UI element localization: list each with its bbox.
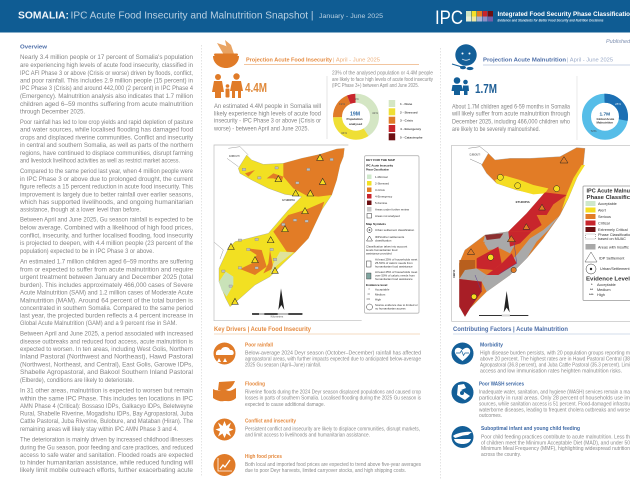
map key: High [597, 293, 605, 297]
map key: High [375, 298, 381, 302]
driver: high food prices: Both local and imported food prices are expected to trend above five-year averages [245, 462, 421, 468]
donut chart: acute malnutrition [586, 98, 624, 135]
text block: paragraph 7: within the same IPC Phase. This includes ten locations in IPC [19, 395, 194, 402]
text block: paragraph 6 [20, 331, 194, 384]
heading: | April - June 2025 [333, 58, 380, 64]
icon: rain cloud [214, 342, 236, 364]
map key: levels humanitarian food [366, 248, 398, 252]
map: acute food insecurity: ETHIOPIA [282, 198, 295, 202]
icon: children [452, 77, 469, 95]
map key: ** [590, 288, 593, 292]
text block: paragraph 4: Between April and June 2025, Gu season rainfall is expected to be [20, 217, 194, 224]
donut chart: acute malnutrition: Malnutrition [596, 120, 613, 124]
factor: infant and young child feeding: across the country. [481, 452, 521, 458]
map key: Evidence level [366, 283, 387, 287]
driver: poor rainfall: 2025 Gu season (April–June) rainfall. [245, 363, 321, 369]
text block: paragraph 3 [19, 168, 194, 214]
text block: paragraph 6: Between April and June 2025, a period associated with increased [20, 331, 194, 338]
map key: Phase Classification [366, 168, 389, 172]
map key: 4-Emergency [375, 194, 393, 198]
factor: poor WASH services: Poor WASH services [479, 382, 524, 388]
text block: paragraph 1: Nearly 3.4 million people or 17 percent of Somalia's population [20, 54, 194, 61]
map key: Map Symbols [366, 222, 386, 226]
text block: paragraph 1: children aged 6–59 months suffering from acute malnutrition [20, 101, 194, 108]
map key: Medium [375, 292, 386, 296]
text block: paragraph 4: below average. Combined with a likelihood of high food prices, [20, 224, 193, 232]
title: January - June 2025 [319, 13, 383, 20]
map key: over 50% of caloric needs from [375, 274, 415, 278]
IPC logo: IPC [435, 8, 463, 29]
map key: *** [366, 298, 371, 302]
map key: * [368, 288, 370, 292]
driver: conflict and insecurity: Conflict and insecurity [245, 419, 297, 425]
icon: child face with spoon [452, 44, 477, 70]
text block: paragraph 5: Acute Malnutrition (SAM) and 1.2 million cases of Moderate Acute [20, 290, 194, 297]
donut chart: acute malnutrition: 28% [615, 102, 621, 106]
driver: poor rainfall: agropastoral areas, with further impacts expected due to anticipated below-average [245, 357, 421, 363]
chart legend: 2 - Stressed [400, 110, 418, 114]
map: acute food insecurity [214, 145, 362, 321]
text block: paragraph 7: Cattle Pastoral, Juba Riverine, Bulobure, and Mataban (Hiran). The [20, 418, 194, 425]
factor: morbidity [452, 342, 630, 374]
donut chart: population by phase: 34% [341, 131, 347, 135]
text block: paragraph 1: and poor rainfall. This includes 2.9 million people (15 percent) in [20, 78, 194, 85]
text block: paragraph 3: assistance, though at a lower level than before. [20, 207, 141, 214]
map key: Areas with Insuffic [598, 246, 629, 250]
north arrow [278, 288, 284, 310]
icon: explosion [214, 418, 236, 440]
driver: poor rainfall: Poor rainfall [245, 343, 273, 349]
donut chart: population by phase: 41% [372, 111, 378, 115]
text block: paragraph 3: improvement is largely due to better rainfall over earlier seasons, [20, 191, 193, 198]
text block: paragraph 8: likely limit mobile outreach efforts, further exacerbating acute [20, 467, 194, 474]
map key: Extremely Critical [598, 228, 628, 232]
text block: paragraph 5: urgent treatment between January and December 2025 (total [20, 274, 193, 281]
driver: flooding [213, 381, 421, 408]
icon: family [212, 73, 243, 98]
driver: conflict and insecurity: and limit access to livelihoods and humanitarian assistance. [245, 432, 370, 438]
driver: conflict and insecurity: Persistent conflict and insecurity are likely to displace communities, disrupt markets, [245, 427, 420, 433]
factor: infant and young child feeding [452, 426, 630, 458]
text block: paragraph 7: AMN Phase 4 (Critical): Bossaso IDPs, Galkacyo IDPs, Beletweyne [20, 403, 194, 410]
chart legend: 5 - Catastrophe [400, 135, 423, 139]
heading: | April - June 2025 [567, 58, 613, 64]
map key: Acceptable [597, 283, 616, 287]
donut chart: population by phase: 6% [354, 97, 359, 101]
map key: Areas under further review [375, 208, 410, 212]
map key: Critical [598, 222, 610, 226]
chart legend: 1 - None [400, 102, 412, 106]
text block: paragraph 2: crops and displaced riverine communities. Conflict and insecurity [20, 134, 194, 142]
heading: Projection Acute Food Insecurity [246, 58, 333, 64]
text block: 1.7M description: will likely suffer from acute malnutrition through [451, 111, 571, 118]
map key: humanitarian food assistance [375, 264, 413, 268]
icon: hand washing [452, 382, 474, 404]
map key: *** [589, 293, 594, 297]
icon: feeding bowl [452, 426, 474, 448]
text block: analysed population: (IPC Phase 3+) between April and June 2025. [332, 83, 419, 89]
text block: paragraph 2 [20, 119, 194, 165]
map key [364, 156, 419, 313]
driver: conflict and insecurity [214, 418, 420, 440]
panel: projection acute malnutrition [451, 44, 630, 321]
driver: flooding: losses in parts of southern Somalia. Localised flooding during the 2025 Gu season is [245, 396, 421, 402]
map key: Scarce evidence due to limited or [375, 303, 418, 307]
map key: assistance provided [366, 252, 392, 256]
map: acute food insecurity: DJIBOUTI [229, 156, 240, 158]
text block: paragraph 6: expected to worsen. In ten areas, including West Golis, Northern [20, 346, 194, 353]
icon: heart [452, 342, 474, 364]
donut chart: population by phase [338, 97, 378, 135]
text block: paragraph 3: Compared to the same period last year, when 4 million people were [20, 168, 194, 175]
donut chart: population by phase: 19M [350, 112, 360, 118]
heading: Projection Acute Malnutrition [483, 58, 566, 64]
donut chart: acute malnutrition: 1.7M [600, 112, 610, 118]
text block: paragraph 8: during the Gu season, poor feeding and care practices, and reduced [20, 444, 194, 452]
donut chart: population by phase: Population [346, 117, 363, 121]
driver: high food prices: due to poor Deyr harvests, limited carryover stocks, and high shipping costs. [245, 468, 406, 474]
icon: grain bowl [213, 40, 239, 68]
text block: 1.7M description [451, 103, 571, 133]
heading: Contributing Factors | Acute Malnutrition [453, 327, 568, 333]
text block: paragraph 8: The deterioration is mainly driven by increased childhood illnesses [20, 437, 193, 444]
text block: paragraph 8: to hinder humanitarian assistance, while reduced funding will [20, 460, 193, 467]
text block: paragraph 4 [20, 217, 194, 255]
map key: based on MUAC [598, 237, 626, 241]
driver: flooding: Flooding [245, 382, 265, 388]
text block: paragraph 4: conflict, insecurity, and further localised flooding, food insecurity [20, 232, 194, 240]
map key: KEY FOR THE MAP [366, 158, 395, 162]
title [18, 10, 383, 22]
donut chart: acute malnutrition: 72% [590, 129, 597, 133]
IPC logo [435, 8, 493, 29]
map key [583, 186, 630, 300]
map key: no humanitarian access [375, 306, 406, 310]
panel: key drivers [213, 327, 421, 476]
text block: 4.4M description [213, 103, 322, 132]
text block: paragraph 7 [19, 388, 194, 433]
text block: paragraph 2: and livestock livelihood activities as well as restrict market access. [20, 158, 180, 165]
heading: Key Drivers | Acute Food Insecurity [214, 327, 312, 333]
map key: 1-Minimal [375, 175, 388, 179]
text block: analysed population: are likely to face high levels of acute food insecurity [332, 77, 433, 83]
text block: paragraph 6: Inland Pastoral (Northwest and Northeast), Hawd Pastoral [20, 354, 193, 361]
text block: paragraph 2: in central and southern Somalia, as well as parts of the northern [20, 142, 194, 149]
text block: paragraph 5: Malnutrition (MAM). Around 64 percent of the total burden is [20, 297, 193, 304]
text block: 4.4M description: worse) - between April and June 2025. [213, 125, 309, 132]
driver: flooding: expected to cause additional damage. [245, 402, 325, 408]
text block: paragraph 5 [20, 259, 194, 327]
driver: high food prices: High food prices [245, 454, 282, 460]
text block: paragraph 6: Shabelle Agropastoral, and Bakool Southern Inland Pastoral [20, 369, 193, 376]
map key: Phase Classific [586, 195, 630, 201]
map: acute malnutrition: KENYA [453, 269, 456, 278]
driver: high food prices [214, 454, 421, 476]
figure: 4.4M: 4.4M [245, 81, 267, 95]
title: IPC Acute Food Insecurity and Malnutrition Snapshot | [70, 10, 314, 22]
text block: paragraph 3: in IPC Phase 3 or above due to prolonged drought, the current [20, 176, 193, 183]
text block: paragraph 7: In 31 other areas, malnutrition is expected to worsen but remain [20, 388, 194, 395]
map key: Acceptable [375, 288, 390, 292]
text block: 4.4M description: likely experience high levels of acute food [214, 110, 322, 117]
text block: paragraph 2: regions, have continued to displace communities, disrupt farming [20, 150, 194, 157]
map key: Serious [598, 215, 611, 219]
text block: paragraph 7: Rural, Shabelle Riverine, Mogadishu IDPs, Bay Agropastoral, Juba [20, 410, 194, 418]
text block: paragraph 7: remaining areas will likely stay within IPC AMN Phase 3 and 4. [20, 426, 178, 433]
map key: 25-50% of caloric needs from [375, 261, 413, 265]
map key: Urban settlement classification [375, 228, 415, 232]
map key: 2-Stressed [375, 182, 389, 186]
text block: paragraph 4: is projected to deepen, with 4.4 million people (23 percent of the [20, 240, 194, 247]
chart legend [389, 100, 423, 140]
driver: poor rainfall [214, 342, 421, 369]
map key: IPC Acute Insecurity [366, 164, 393, 168]
panel: contributing factors [452, 327, 630, 458]
map key: * [591, 283, 593, 287]
map key: 5-Famine [375, 201, 388, 205]
factor: morbidity: Morbidity [480, 343, 504, 349]
text block: paragraph 3: which has supported livelihoods, and ongoing humanitarian [19, 199, 194, 206]
map key: humanitarian food assistance [375, 277, 413, 281]
text block: paragraph 5: burden). This includes approximately 466,000 cases of Severe [20, 282, 194, 289]
published note: Published [606, 39, 630, 45]
factor: infant and young child feeding: Suboptimal infant and young child feeding [481, 426, 581, 432]
IPC name: Evidence and Standards for Better Food Security and Nutrition Decisions [498, 18, 604, 22]
map key: IPC Acute Malnu [586, 188, 630, 194]
IPC name [498, 11, 630, 22]
panel: projection acute food insecurity [212, 40, 433, 321]
chart legend: 4 - Emergency [400, 127, 421, 131]
scale bar [252, 313, 302, 319]
text block: paragraph 3: figure reflects a 15 percent reduction in acute food insecurity. This [20, 184, 193, 190]
text block: 4.4M description: insecurity - IPC Phase 3 or above (Crisis or [214, 118, 321, 125]
scale bar: Kilometers [271, 315, 284, 319]
map key: Areas not analysed [375, 214, 400, 218]
text block: paragraph 6: (Elberde), conditions are likely to deteriorate. [20, 377, 134, 384]
text block: analysed population [332, 70, 433, 89]
text block: analysed population: 23% of the analysed population or 4.4M people [332, 70, 433, 76]
map key: IDPs/other settlements [375, 235, 405, 239]
map key: 3-Crisis [375, 188, 385, 192]
text block: paragraph 5: concentrated in southern Somalia. Compared to the same period [20, 305, 194, 312]
text block: paragraph 1: are experiencing high levels of acute food insecurity, classified in [20, 62, 194, 69]
factor: poor WASH services: particularly in rural areas. Only 28 percent of households use im [479, 396, 630, 402]
text block: paragraph 5: An estimated 1.7 million children aged 6–59 months are suffering [20, 259, 194, 266]
text block: 4.4M description: An estimated 4.4M people in Somalia will [214, 103, 321, 110]
text block: paragraph 5: from or expected to suffer from acute malnutrition and require [20, 266, 194, 273]
text block: paragraph 2: and water sources, while localised flooding has damaged food [20, 127, 194, 134]
map: acute malnutrition: ETHIOPIA [516, 200, 531, 204]
icon: price chart [214, 454, 236, 476]
text block: paragraph 2: Poor rainfall has led to low crop yields and rapid depletion of pasture [20, 119, 194, 126]
figure: 1.7M: 1.7M [475, 82, 497, 96]
text block: paragraph 1: through December 2025. [20, 109, 85, 116]
text block: 1.7M description: About 1.7M children aged 6-59 months in Somalia [452, 103, 570, 110]
icon: flood [213, 381, 236, 401]
map key: IDP Settlement [599, 256, 625, 260]
heading [244, 58, 419, 64]
map key: Urban/Settlement [600, 267, 630, 271]
text block: paragraph 6: disease outbreaks and reduced food access, acute malnutrition is [20, 338, 193, 345]
chart legend: 3 - Crisis [400, 119, 413, 123]
map key: Classification takes into account [366, 244, 407, 248]
text block: paragraph 1: IPC Phase 3 (Crisis) and around 442,000 (2 percent) in IPC Phase 4 [20, 85, 194, 92]
map key: Medium [597, 288, 611, 292]
text block: 1.7M description: December 2025, including 466,000 children who [452, 118, 570, 125]
text block: paragraph 4: population) expected to be in IPC Phase 3 or above. [20, 248, 154, 255]
heading [483, 58, 630, 65]
text block: paragraph 1: IPC AFI Phase 3 or above (Crisis or worse) driven by floods, conflict, [20, 70, 193, 77]
map key: At least 25% of households meet [375, 270, 417, 274]
title: SOMALIA: [18, 10, 69, 22]
text block: paragraph 1: (Emergency). Malnutrition analysis also indicates that 1.7 million [20, 93, 194, 100]
driver: flooding: Riverine floods during the 2024 Deyr season displaced populations and caused crop [245, 390, 421, 396]
map key: Evidence Level [586, 276, 630, 282]
map: acute malnutrition [452, 145, 630, 321]
text block: paragraph 6: (Northwest, Northeast, and Central), East Golis, Garowe IDPs, [20, 362, 193, 368]
column separators [202, 45, 440, 480]
text block: paragraph 1 [20, 54, 194, 116]
panel: overview [19, 44, 194, 474]
map: acute malnutrition: DJIBOUTI [470, 155, 481, 157]
map key: At least 25% of households meet [375, 258, 417, 262]
driver: poor rainfall: Below-average 2024 Deyr season (October–December) rainfall has affected [245, 351, 421, 357]
factor: poor WASH services: outcomes. [479, 413, 502, 419]
map key: classification [375, 238, 392, 242]
donut chart: acute malnutrition: Global Acute [596, 117, 615, 121]
map key: Alert [598, 208, 607, 212]
text block: paragraph 5: Global Acute Malnutrition (GAM) and a 9 percent rise in SAM. [20, 320, 177, 327]
map key: ** [368, 292, 371, 296]
factor: morbidity: access and low immunisation rates heighten malnutrition risks. [480, 368, 622, 374]
text block: 1.7M description: are likely to be severely malnourished. [452, 126, 540, 133]
text block: paragraph 8: access to safe water and sanitation. Flooded roads are expected [20, 452, 194, 459]
text block: paragraph 8 [20, 437, 194, 474]
factor: poor WASH services [452, 382, 630, 419]
donut chart: population by phase: analysed [349, 122, 362, 126]
donut chart: population by phase: 19% [339, 102, 345, 106]
header banner [0, 0, 630, 32]
map key: Acceptable [598, 202, 617, 206]
text block: paragraph 5: last year, the projected burden reflects a 4 percent increase in [20, 312, 194, 320]
overview heading: Overview [20, 44, 48, 50]
